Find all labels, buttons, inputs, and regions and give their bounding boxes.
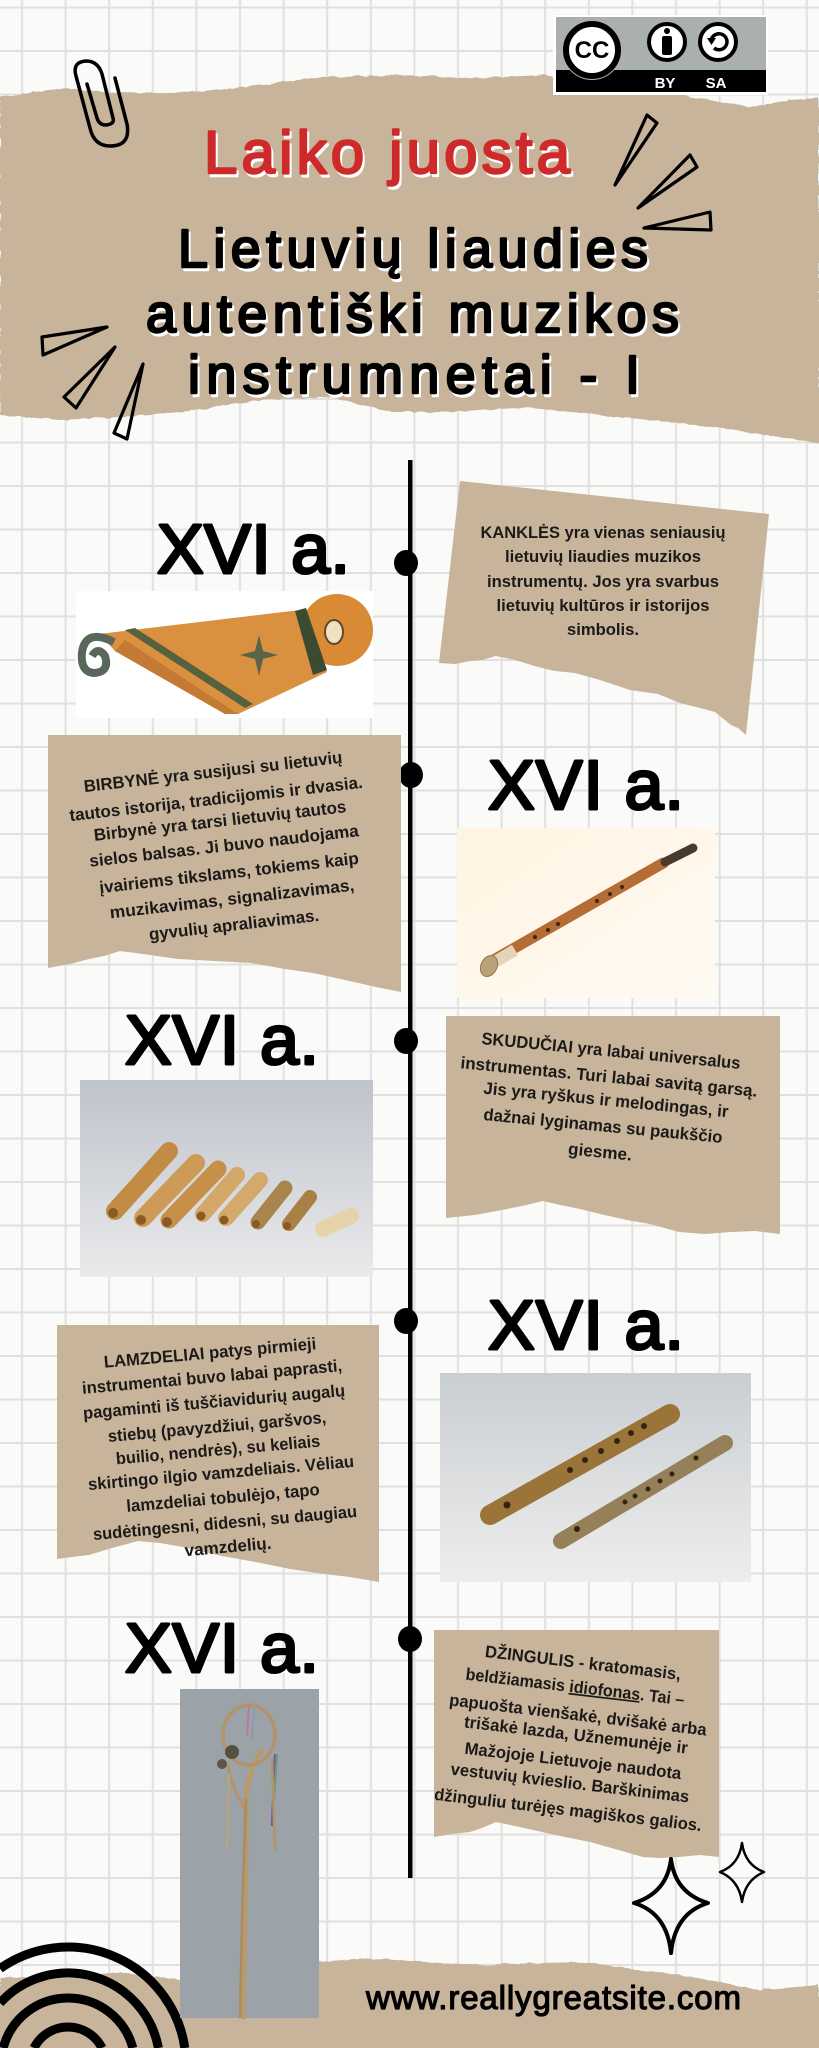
panel: skudučiai: instrumentas. Turi labai savitą garsą.	[460, 1053, 758, 1101]
image: skudučiai	[80, 1080, 373, 1277]
panel: kanklės	[439, 481, 769, 735]
panel: kanklės: simbolis.	[567, 620, 639, 639]
title: Lietuvių liaudies	[178, 219, 648, 279]
image: džingulis	[180, 1689, 319, 2018]
panel: skudučiai: SKUDUČIAI yra labai universalus	[481, 1029, 741, 1073]
date label 5: XVI a.	[125, 1609, 319, 1687]
licence badge: CC BY-SA: SA	[706, 75, 727, 92]
footer torn paper	[0, 1958, 819, 2048]
image: lamzdeliai	[440, 1373, 751, 1582]
panel: lamzdeliai: pagaminti iš tuščiavidurių augalų	[82, 1381, 346, 1423]
panel: birbynė: sielos balsas. Ji buvo naudojama	[88, 821, 360, 871]
heading: Laiko juosta: Laiko juosta	[204, 119, 571, 186]
panel: birbynė: muzikavimas, signalizavimas,	[109, 876, 355, 922]
date label 4: XVI a.	[488, 1286, 684, 1364]
licence badge: CC BY-SA	[553, 15, 768, 95]
panel: lamzdeliai	[57, 1325, 379, 1582]
panel: birbynė: Birbynė yra tarsi lietuvių tautos	[93, 797, 347, 845]
title: autentiški muzikos	[146, 284, 679, 344]
licence badge: CC BY-SA: CC	[575, 37, 609, 64]
panel: birbynė: gyvulių apraliavimas.	[148, 906, 320, 944]
licence badge: CC BY-SA: BY	[655, 75, 675, 92]
date label 1: XVI a.	[157, 510, 350, 588]
panel: birbynė: BIRBYNĖ yra susijusi su lietuvių	[83, 748, 343, 796]
panel: birbynė	[48, 735, 401, 992]
panel: lamzdeliai: sudėtingesni, didesni, su daugiau	[92, 1502, 358, 1544]
panel: džingulis: papuošta vienšakė, dvišakė arba	[448, 1690, 708, 1740]
panel: lamzdeliai: vamzdelių.	[184, 1534, 272, 1560]
panel: birbynė: tautos istorija, tradicijomis ir dvasia.	[68, 773, 364, 825]
panel: džingulis: DŽINGULIS - kratomasis,	[484, 1642, 682, 1684]
date label 3: XVI a.	[125, 1001, 319, 1079]
footer url: www.reallygreatsite.com	[365, 1979, 741, 2016]
panel: lamzdeliai: LAMZDELIAI patys pirmieji	[103, 1334, 317, 1372]
image: kanklės	[76, 591, 373, 718]
panel: lamzdeliai: stiebų (pavyzdžiui, garšvos,	[107, 1408, 327, 1446]
panel: kanklės: lietuvių kultūros ir istorijos	[496, 596, 710, 615]
panel: skudučiai: dažnai lyginamas su paukščio	[483, 1105, 723, 1147]
timeline axis	[394, 460, 423, 1878]
panel: džingulis: džinguliu turėjęs magiškos galios.	[433, 1785, 703, 1835]
date label 2: XVI a.	[488, 746, 684, 824]
panel: lamzdeliai: instrumentai buvo labai paprasti,	[81, 1356, 343, 1398]
panel: birbynė: įvairiems tikslams, tokiems kaip	[98, 849, 360, 897]
title: instrumnetai - I	[188, 345, 640, 405]
icon: concentric arcs	[0, 1947, 185, 2048]
panel: skudučiai: Jis yra ryškus ir melodingas, ir	[483, 1079, 730, 1121]
header torn paper	[0, 75, 819, 443]
panel: skudučiai: giesme.	[567, 1139, 633, 1165]
panel: džingulis: beldžiamasis idiofonas. Tai –	[465, 1665, 685, 1709]
icon: rays left	[42, 327, 143, 439]
icon: rays right	[615, 115, 711, 230]
panel: kanklės: instrumentų. Jos yra svarbus	[487, 572, 719, 591]
panel: džingulis: Mažojoje Lietuvoje naudota	[464, 1739, 683, 1783]
icon: large sparkle	[634, 1859, 708, 1953]
title	[146, 219, 679, 405]
panel: kanklės: KANKLĖS yra vienas seniausių	[480, 523, 726, 542]
panel: kanklės: lietuvių liaudies muzikos	[505, 547, 701, 566]
icon: small sparkle	[720, 1843, 764, 1902]
panel: lamzdeliai: lamzdeliai tobulėjo, tapo	[126, 1480, 320, 1516]
panel: lamzdeliai: skirtingo ilgio vamzdeliais. Vėliau	[87, 1452, 355, 1494]
panel: džingulis	[433, 1630, 719, 1858]
image: birbynė	[457, 828, 715, 998]
panel: džingulis: trišakė lazda, Užnemunėje ir	[463, 1712, 689, 1758]
panel: džingulis: vestuvių kvieslio. Barškinimas	[450, 1760, 690, 1806]
panel: skudučiai	[446, 1016, 780, 1234]
icon: paperclip	[75, 61, 128, 146]
panel: lamzdeliai: builio, nendrės), su keliais	[115, 1432, 321, 1468]
